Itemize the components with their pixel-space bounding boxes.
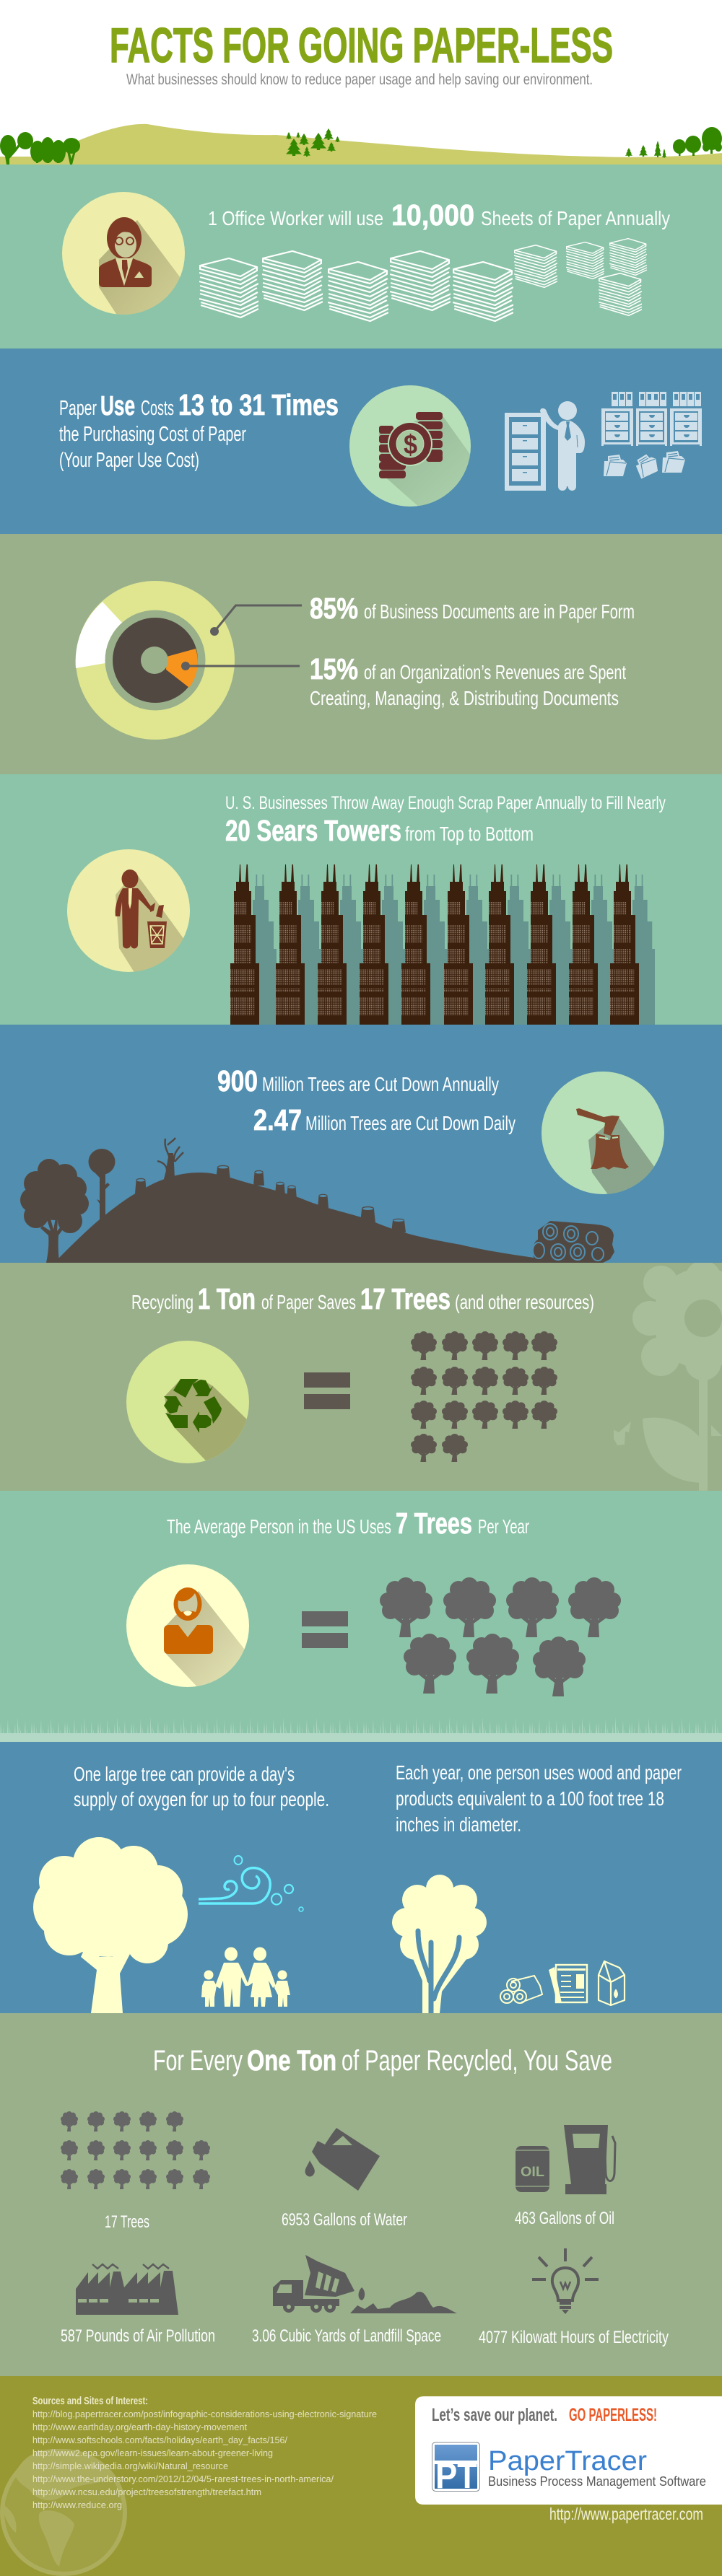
icon: oil barrel and pump: OIL	[521, 2165, 544, 2180]
panel: trees cut down	[0, 1025, 722, 1263]
text: wood use: inches in diameter.	[396, 1813, 521, 1836]
statement: trees cut: 2.47	[253, 1103, 302, 1136]
sources list: http://www.ncsu.edu/project/treesofstrength/treefact.htm	[32, 2487, 261, 2497]
statement: cost times: Use	[100, 391, 135, 421]
landscape: hill and trees	[0, 124, 722, 165]
chart: ten tower shadows	[253, 875, 655, 1025]
text: wood use	[396, 1761, 682, 1836]
statement: 10,000 sheets: 1 Office Worker will use	[208, 207, 383, 229]
panel: one ton recycled saves	[0, 2013, 722, 2376]
panel: office worker paper use	[0, 165, 722, 349]
statement: recycling 1 ton: Recycling	[131, 1291, 193, 1313]
statement: cost times: 13 to 31 Times	[178, 388, 339, 421]
decoration: flower and butterfly	[614, 1263, 722, 1491]
decoration: globe	[2, 2449, 125, 2574]
label: 17 trees: 17 Trees	[105, 2212, 149, 2232]
label: air pollution: 587 Pounds of Air Pollution	[61, 2326, 215, 2346]
newspaper	[549, 1965, 587, 2003]
icon: pouring water can	[305, 2128, 380, 2191]
sources list: http://www.reduce.org	[32, 2500, 122, 2510]
panel: paper use costs	[0, 349, 722, 534]
sources list: http://blog.papertracer.com/post/infographic-considerations-using-electronic-signature	[32, 2409, 377, 2419]
icon: man with filing cabinets	[505, 392, 702, 491]
statement: trees cut: 900	[217, 1064, 258, 1098]
sources list: http://www.earthday.org/earth-day-history-movement	[32, 2422, 247, 2432]
statement: cost times: Costs	[141, 397, 174, 420]
icon: factory	[76, 2264, 178, 2315]
thin tree	[88, 1149, 116, 1221]
text: oxygen: supply of oxygen for up to four people.	[74, 1788, 329, 1810]
statement: 15%	[310, 652, 626, 709]
statement: recycling 1 ton: of Paper Saves	[261, 1291, 356, 1313]
icon: bearded person in circle	[126, 1564, 253, 1692]
callout lines	[181, 605, 302, 670]
statement: 7 trees: 7 Trees	[396, 1507, 472, 1540]
chart: ten towers	[230, 864, 639, 1025]
statement: 7 trees: The Average Person in the US Uses	[167, 1515, 391, 1538]
statement: recycling 1 ton: 1 Ton	[198, 1282, 256, 1315]
panel: footer	[0, 2376, 722, 2576]
sources list: Sources and Sites of Interest:	[32, 2395, 148, 2407]
icon: logs, paper and milk carton	[500, 1961, 625, 2005]
statement: trees cut: Million Trees are Cut Down Daily	[305, 1112, 516, 1134]
statement: 10,000 sheets	[208, 198, 670, 232]
dead tree	[157, 1138, 183, 1179]
milk carton	[599, 1961, 625, 2005]
logs	[500, 1976, 542, 2003]
icon: oil barrel and pump	[516, 2125, 615, 2194]
statement: scrap paper: from Top to Bottom	[405, 823, 534, 845]
icon: 17 trees	[61, 2111, 210, 2189]
icon: wind and oxygen bubbles	[199, 1856, 303, 1911]
logo: PT	[432, 2442, 479, 2496]
decoration: grass	[0, 1716, 722, 1742]
label: oil: 463 Gallons of Oil	[515, 2209, 614, 2228]
panel: business documents	[0, 534, 722, 774]
statement: cost times: (Your Paper Use Cost)	[59, 449, 199, 472]
sources list	[32, 2395, 377, 2510]
heading: of Paper Recycled, You Save	[342, 2045, 612, 2077]
panel: oxygen and wood use	[0, 1742, 722, 2013]
statement: 15%: 15%	[310, 652, 358, 685]
icon: axe in stump	[542, 1072, 664, 1194]
label: landfill: 3.06 Cubic Yards of Landfill Space	[252, 2326, 441, 2346]
stumps	[135, 1165, 406, 1232]
statement: trees cut: Million Trees are Cut Down Annually	[262, 1073, 499, 1095]
label: water: 6953 Gallons of Water	[282, 2210, 407, 2230]
panel: average person uses 7 trees	[0, 1491, 722, 1742]
heading: One Ton	[247, 2045, 336, 2077]
sources list: http://www.softschools.com/facts/holidays/earth_day_facts/156/	[32, 2435, 287, 2445]
chart: donut 85% / 15%	[76, 581, 235, 740]
statement: cost times	[59, 388, 339, 472]
callout: PaperTracer card: GO PAPERLESS!	[569, 2405, 657, 2425]
large tree	[20, 1159, 89, 1263]
chart: 17 trees	[411, 1331, 557, 1462]
icon: light bulb	[532, 2248, 599, 2314]
statement: 10,000 sheets: Sheets of Paper Annually	[481, 207, 670, 229]
statement: recycling 1 ton: 17 Trees	[360, 1282, 451, 1315]
statement: cost times: Paper	[59, 397, 97, 420]
callout: PaperTracer card	[415, 2396, 722, 2505]
statement: trees cut	[217, 1064, 516, 1136]
statement: 85%: 85%	[310, 592, 358, 625]
text: oxygen: One large tree can provide a day's	[74, 1763, 295, 1785]
callout: PaperTracer card: Let’s save our planet.	[432, 2405, 557, 2425]
icon: recycle symbol in circle	[126, 1341, 249, 1463]
icon: office worker in circle	[62, 192, 185, 315]
heading	[153, 2045, 612, 2077]
icon: stack of logs	[533, 1221, 614, 1263]
chart: 7 trees	[380, 1577, 621, 1696]
illustration: large tree	[33, 1837, 188, 2013]
sources list: http://www2.epa.gov/learn-issues/learn-about-greener-living	[32, 2448, 273, 2458]
icon: paper stacks	[199, 239, 648, 321]
icon: equals	[304, 1372, 350, 1409]
logo: PT: PT	[435, 2455, 477, 2496]
heading: For Every	[153, 2045, 243, 2077]
panel: sears towers	[0, 774, 722, 1025]
callout: PaperTracer card: PaperTracer	[488, 2446, 647, 2476]
statement: 7 trees: Per Year	[478, 1515, 529, 1538]
subtitle: What businesses should know to reduce paper usage and help saving our environment.	[126, 71, 593, 88]
callout: PaperTracer card: Business Process Management Software	[488, 2474, 706, 2489]
illustration: tall tree	[392, 1875, 487, 2013]
statement: scrap paper: 20 Sears Towers	[225, 814, 401, 847]
statement: 7 trees	[167, 1507, 529, 1540]
man	[540, 401, 585, 491]
icon: dump truck and landfill	[273, 2255, 457, 2313]
text: oxygen	[74, 1763, 329, 1810]
icon: family	[201, 1947, 290, 2007]
statement: 10,000 sheets: 10,000	[391, 198, 474, 232]
statement: recycling 1 ton: (and other resources)	[455, 1291, 594, 1313]
cabinets and binders	[601, 392, 702, 479]
icon: coins in circle: $	[404, 430, 417, 460]
statement: 15%: Creating, Managing, & Distributing Documents	[310, 687, 619, 709]
statement: recycling 1 ton	[131, 1282, 594, 1315]
illustration: deforested hill	[20, 1138, 549, 1263]
sources list: http://simple.wikipedia.org/wiki/Natural_resource	[32, 2461, 228, 2471]
filing cabinet	[505, 413, 546, 491]
statement: cost times: the Purchasing Cost of Paper	[59, 423, 246, 446]
statement: 85%	[310, 592, 635, 625]
icon: man throwing paper in bin	[67, 849, 190, 972]
background: white header	[0, 0, 722, 165]
icon: coins in circle	[349, 385, 471, 507]
icon: equals	[302, 1611, 348, 1648]
statement: scrap paper	[225, 793, 666, 847]
panel: recycling one ton	[0, 1261, 722, 1494]
sources list: http://www.the-understory.com/2012/12/04/5-rarest-trees-in-north-america/	[32, 2474, 334, 2484]
